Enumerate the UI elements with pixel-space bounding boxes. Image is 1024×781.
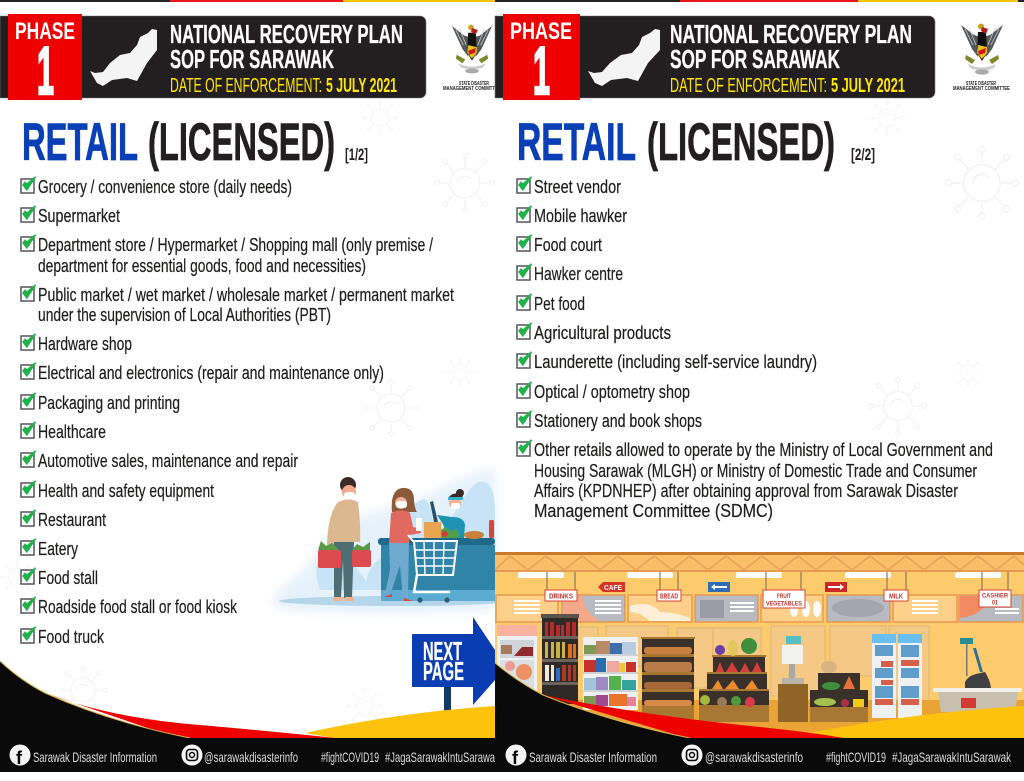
sign: cafe [598,582,625,592]
store wall [495,552,1024,738]
footer right: instagram: @sarawakdisasterinfo [705,749,803,765]
heading: right page [517,113,875,172]
item: Health and safety equipment [38,480,214,501]
heading: left page: (LICENSED) [148,113,335,172]
item: Roadside food stall or food kiosk [38,596,238,617]
item: Mobile hawker [534,205,627,226]
item: Food court [534,234,602,255]
sign: cashier 01: 01 [992,600,998,606]
item: Management Committee (SDMC) [534,500,773,521]
heading: left page: RETAIL [22,113,138,172]
sign: milk [884,572,908,601]
item: Public market / wet market / wholesale market / permanent market [38,284,454,305]
footer left: facebook: f [16,748,23,768]
footer right: instagram [682,744,803,766]
enforcement date: 5 JULY 2021 [831,74,905,97]
item [21,538,79,559]
item [21,205,120,226]
item: Agricultural products [534,322,671,343]
yellow wave [305,706,495,739]
heading: right page: [2/2] [851,145,875,164]
woman with shopping cart [384,488,457,603]
item: department for essential goods, food and necessities) [38,255,366,276]
illustration: supermarket interior [495,552,1024,738]
wall posters [496,595,1023,622]
footer right: facebook [506,744,657,768]
item: Grocery / convenience store (daily needs) [38,176,292,197]
top colour strip [0,0,1024,2]
footer right: facebook: f [512,748,519,768]
footer left: hashtags: #JagaSarawakIntuSarawa [385,749,495,765]
poster details [514,596,1019,621]
icon: state emblem left [443,25,495,92]
item [21,392,180,413]
item [21,421,106,442]
sign: milk: MILK [889,594,903,600]
panel: right page header [495,14,935,109]
header title: SOP FOR SARAWAK [170,44,334,74]
footer left: instagram: @sarawakdisasterinfo [204,749,298,765]
ceiling truss [495,552,1024,572]
icon: state emblem left: STATE DISASTER [459,81,489,87]
item [517,234,602,255]
header title [670,19,912,74]
cashier [424,489,494,539]
footer left: instagram [182,744,298,766]
black curve [495,663,690,772]
item: under the supervision of Local Authorities (PBT) [38,304,331,325]
item: Optical / optometry shop [534,381,690,402]
sign: bread [657,572,681,601]
grocery shelf [583,637,638,710]
sign: drinks: DRINKS [549,594,573,600]
yellow wave [808,706,1024,739]
enforcement date: DATE OF ENFORCEMENT: [670,74,827,97]
item: Pet food [534,293,585,314]
weighing scale stand [778,636,808,722]
right footer swoosh [495,663,1024,772]
illustration: shoppers at checkout [272,468,511,613]
arrow: next page sign: PAGE [423,656,464,686]
meat shelf [497,625,537,692]
item: Healthcare [38,421,106,442]
item [517,205,627,226]
vegetable stand [810,661,868,722]
cashier desk [933,638,1022,712]
sign: cashier 01: CASHIER [982,592,1008,600]
item [21,234,434,276]
phase 1 badge: 1 [533,33,550,109]
header title [170,19,403,74]
phase 1 badge: PHASE [510,18,572,45]
man with baskets [318,477,371,601]
drinks fridges [872,634,922,718]
sign: cashier 01 [979,572,1011,607]
footer left: hashtags: #fightCOVID19 [321,749,379,765]
counter [378,538,495,601]
item: Eatery [38,538,79,559]
header title: SOP FOR SARAWAK [670,44,840,74]
phase 1 badge [503,14,580,109]
footer left: facebook: Sarawak Disaster Information [33,749,157,765]
sign: fruit vegetables [763,572,805,608]
item: Electrical and electronics (repair and maintenance only) [38,362,384,383]
footer bar [0,738,1024,772]
baseboard [495,700,1024,738]
heading: left page: [1/2] [345,145,368,164]
item: Restaurant [38,509,106,530]
arrow: next page sign [412,617,495,712]
heading: left page [22,113,368,172]
header title: NATIONAL RECOVERY PLAN [170,19,403,49]
item [21,333,132,354]
item [21,626,105,647]
fruit stand [699,638,769,722]
item [517,293,585,314]
icon: Sarawak map [588,29,660,86]
item: Automotive sales, maintenance and repair [38,450,298,471]
item: Supermarket [38,205,120,226]
icon: Sarawak map [90,29,157,86]
item: Food truck [38,626,105,647]
item [21,284,454,325]
item: Department store / Hypermarket / Shopping mall (only premise / [38,234,434,255]
enforcement date: 5 JULY 2021 [326,74,397,97]
arrow: next page sign: NEXT [423,636,462,666]
footer left: hashtags [321,749,495,765]
store windows [578,626,929,702]
heading: right page: (LICENSED) [647,113,835,172]
header bar [0,16,426,98]
item [517,439,993,521]
footer right: hashtags [826,749,1012,765]
red wave [45,693,345,739]
sign: bread: BREAD [660,594,678,600]
item [517,176,621,197]
item [517,263,623,284]
footer right: hashtags: #fightCOVID19 [826,749,886,765]
icon: state emblem right [953,24,1010,92]
pale blue backdrop [272,468,495,613]
checklist: left page [21,176,454,647]
item: Food stall [38,567,98,588]
phase 1 badge: PHASE [15,18,75,45]
item: Stationery and book shops [534,410,702,431]
footer right: facebook: Sarawak Disaster Information [529,749,657,765]
phase 1 badge: 1 [37,33,54,109]
phase 1 badge [8,14,82,109]
icon: state emblem right: STATE DISASTER [966,81,996,87]
item: Street vendor [534,176,621,197]
icon: state emblem left: MANAGEMENT COMMITT [443,86,495,92]
footer left: facebook [10,744,157,768]
red wave [543,695,850,739]
item: Hawker centre [534,263,623,284]
item [21,509,106,530]
sign: fruit vegetables: VEGETABLES [766,600,803,608]
item [21,480,214,501]
sign: right arrow [825,582,847,592]
checklist: right page [517,176,993,521]
sign: cafe: CAFE [604,585,622,592]
sign: left arrow [708,582,730,592]
faint virus background pattern [1,101,1018,723]
drinks shelf [541,614,579,704]
ceiling lights [518,572,1001,578]
header bar [495,16,935,98]
item: Packaging and printing [38,392,180,413]
header title: NATIONAL RECOVERY PLAN [670,19,912,49]
ground shadow [279,596,511,606]
panel: left page header [0,14,426,109]
item: Launderette (including self-service laundry) [534,351,817,372]
item [21,567,98,588]
sign: fruit vegetables: FRUIT [777,593,791,600]
black curve [0,661,190,772]
left footer swoosh [0,661,495,772]
bread shelf [641,637,695,719]
item: Hardware shop [38,333,132,354]
heading: right page: RETAIL [517,113,636,172]
sign: drinks [545,572,577,601]
enforcement date: DATE OF ENFORCEMENT: [170,74,322,97]
